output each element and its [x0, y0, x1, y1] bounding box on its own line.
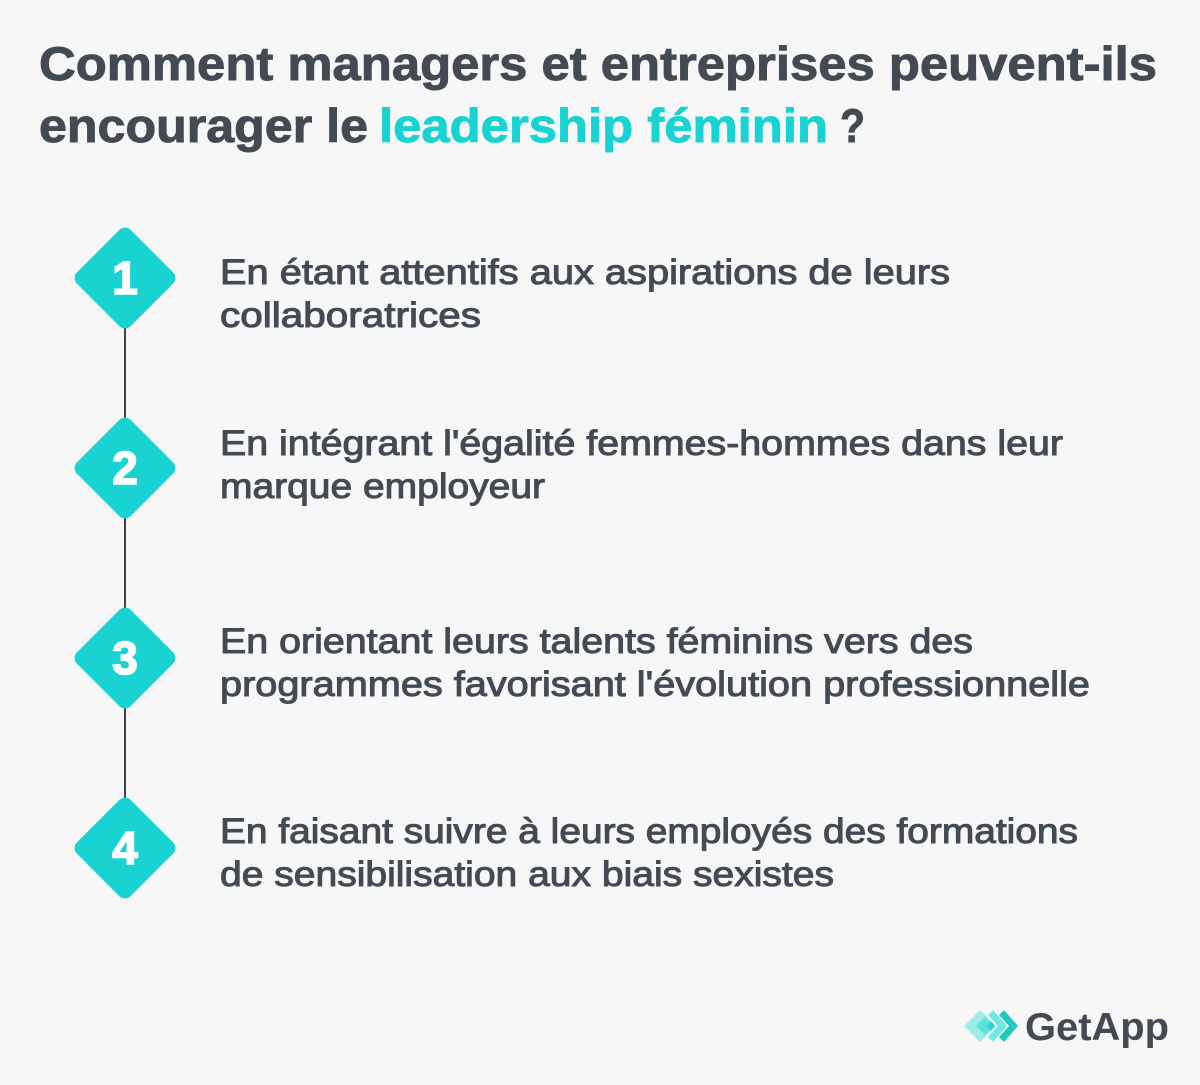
timeline connector	[124, 325, 126, 800]
icon: GetApp chevrons	[964, 1010, 1018, 1042]
icon: diamond number 4: 4	[112, 822, 138, 874]
icon: diamond number 2: 2	[112, 442, 138, 494]
title	[39, 37, 1157, 152]
text: step 4: de sensibilisation aux biais sexistes	[220, 855, 834, 894]
text: step 2	[220, 424, 1063, 506]
step 3	[71, 604, 1090, 712]
title: Comment managers et entreprises peuvent-ils	[39, 37, 1157, 90]
text: step 1: En étant attentifs aux aspirations de leurs	[220, 253, 950, 292]
logo: GetApp	[964, 1006, 1169, 1049]
step 1	[71, 224, 950, 335]
text: step 1	[220, 253, 950, 335]
title: encourager le	[39, 99, 368, 152]
icon: diamond number 3: 3	[112, 632, 138, 684]
icon: diamond number 1: 1	[112, 252, 138, 304]
icon: diamond number 1	[71, 224, 179, 332]
text: step 4	[220, 812, 1078, 894]
step 2	[71, 414, 1063, 522]
text: step 3: programmes favorisant l'évolution professionnelle	[220, 665, 1090, 704]
icon: diamond number 4	[71, 794, 179, 902]
text: step 3	[220, 622, 1090, 704]
text: step 1: collaboratrices	[220, 296, 481, 335]
title: ?	[840, 99, 865, 152]
icon: diamond number 3	[71, 604, 179, 712]
wordmark: GetApp	[1025, 1006, 1169, 1049]
title: leadership féminin	[379, 99, 828, 152]
icon: diamond number 2	[71, 414, 179, 522]
text: step 2: En intégrant l'égalité femmes-hommes dans leur	[220, 424, 1063, 463]
text: step 3: En orientant leurs talents féminins vers des	[220, 622, 973, 661]
step 4	[71, 794, 1078, 902]
text: step 4: En faisant suivre à leurs employés des formations	[220, 812, 1078, 851]
text: step 2: marque employeur	[220, 467, 545, 506]
